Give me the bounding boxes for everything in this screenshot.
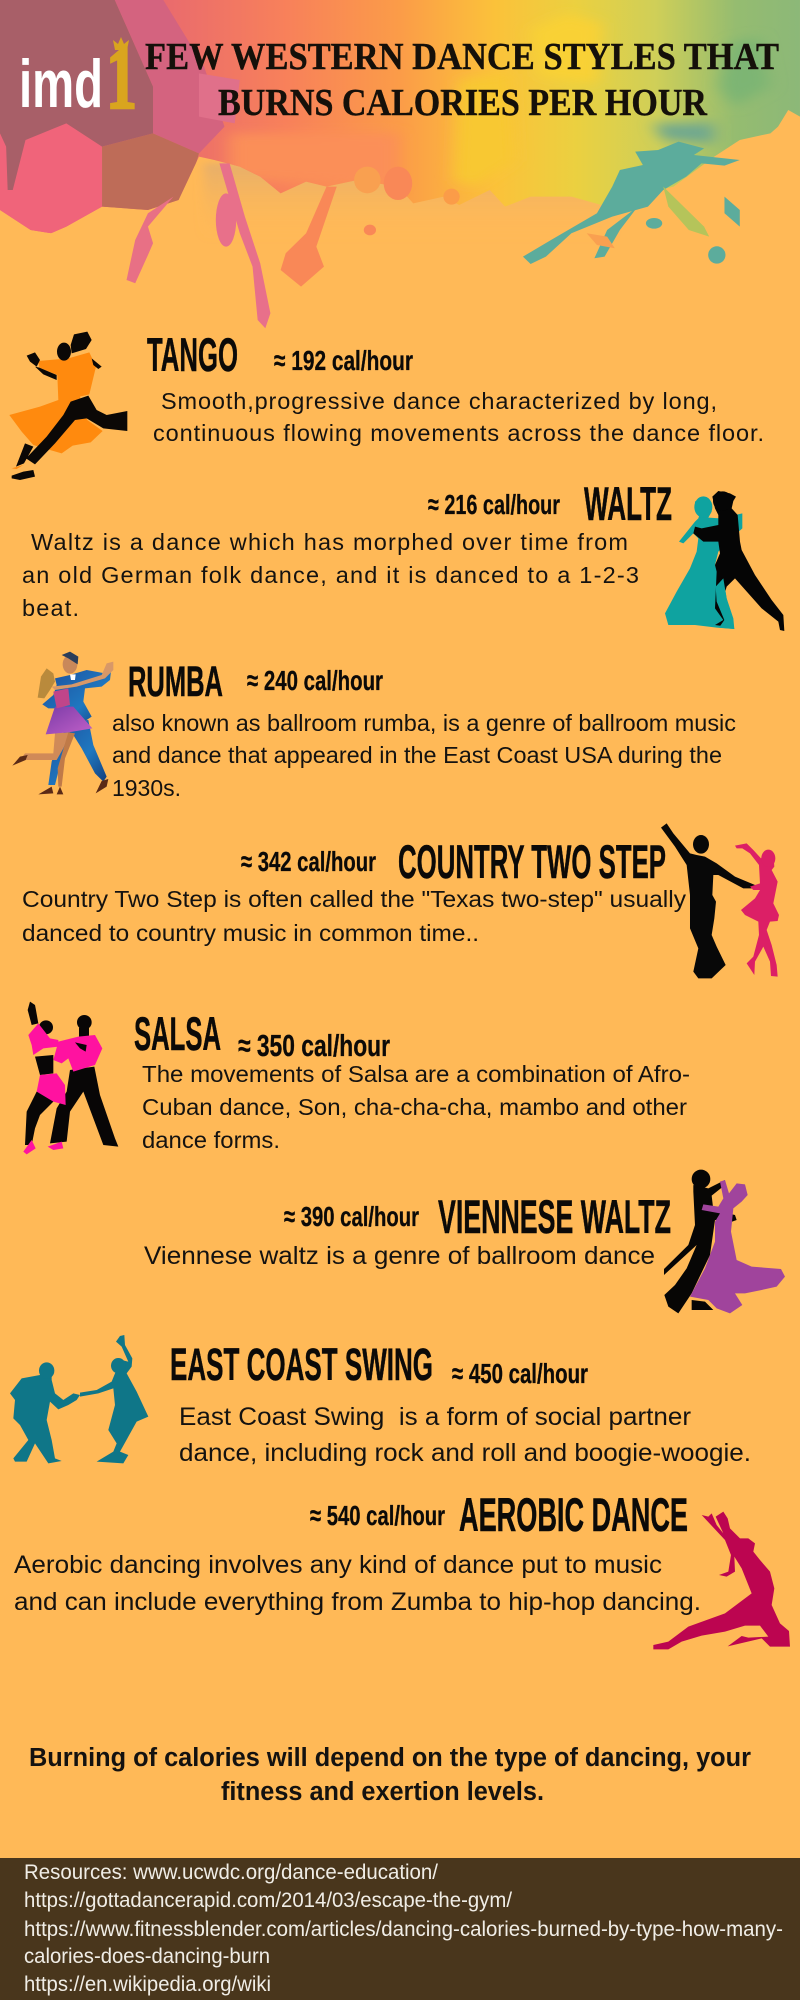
calories: waltz: ≈ 216 cal/hour	[428, 489, 560, 520]
heading: rumba: RUMBA	[128, 658, 223, 706]
title: BURNS CALORIES PER HOUR	[218, 82, 707, 124]
heading: east coast swing: EAST COAST SWING	[170, 1339, 433, 1390]
panel: rumba	[12, 652, 736, 801]
description: waltz	[22, 529, 639, 621]
calories: viennese waltz: ≈ 390 cal/hour	[284, 1201, 419, 1232]
heading: waltz: WALTZ	[584, 477, 672, 530]
calories: tango: ≈ 192 cal/hour	[274, 345, 413, 376]
closing note	[29, 1744, 751, 1806]
description: east coast swing: East Coast Swing is a form of social partner	[179, 1403, 691, 1431]
description: aerobic dance	[14, 1551, 701, 1616]
description: rumba: and dance that appeared in the East Coast USA during the	[112, 742, 722, 768]
icon: aerobic dancer	[653, 1512, 790, 1649]
panel: country two step	[22, 823, 779, 978]
description: salsa: dance forms.	[142, 1127, 280, 1153]
panel: aerobic dance	[14, 1488, 790, 1649]
calories: rumba: ≈ 240 cal/hour	[247, 665, 383, 696]
footer: resources: https://en.wikipedia.org/wiki	[24, 1972, 271, 1996]
description: salsa: Cuban dance, Son, cha-cha-cha, mambo and other	[142, 1094, 687, 1120]
panel: tango	[9, 328, 764, 480]
description: tango	[153, 388, 764, 446]
logo: imd1: 1	[106, 29, 137, 128]
panel: salsa	[23, 1002, 690, 1154]
description: waltz: Waltz is a dance which has morphed over time from	[31, 529, 628, 555]
calories: salsa: ≈ 350 cal/hour	[238, 1028, 390, 1063]
description: east coast swing	[179, 1403, 751, 1467]
footer: resources: Resources: www.ucwdc.org/dance-education/	[24, 1860, 438, 1884]
icon: viennese waltz dancers	[664, 1170, 785, 1313]
calories: east coast swing: ≈ 450 cal/hour	[452, 1358, 588, 1389]
description: rumba: 1930s.	[112, 775, 181, 801]
icon: tango dancers	[9, 332, 127, 480]
footer shadow	[140, 1828, 720, 1888]
description: rumba	[112, 710, 736, 801]
description: viennese waltz: Viennese waltz is a genre of ballroom dance	[144, 1242, 655, 1270]
paint splash header	[0, 0, 800, 328]
closing note: Burning of calories will depend on the type of dancing, your	[29, 1744, 751, 1772]
footer: resources: https://www.fitnessblender.com/articles/dancing-calories-burned-by-type-how-many-	[24, 1917, 783, 1941]
description: waltz: an old German folk dance, and it is danced to a 1-2-3	[22, 562, 639, 588]
description: aerobic dance: Aerobic dancing involves any kind of dance put to music	[14, 1551, 662, 1579]
footer: resources	[0, 1858, 800, 2000]
description: country two step: Country Two Step is often called the "Texas two-step" usually	[22, 886, 686, 912]
description: aerobic dance: and can include everything from Zumba to hip-hop dancing.	[14, 1588, 701, 1616]
description: salsa	[142, 1061, 690, 1153]
panel: viennese waltz	[144, 1170, 785, 1313]
icon: swing dancers	[10, 1335, 148, 1463]
heading: salsa: SALSA	[134, 1007, 221, 1060]
description: waltz: beat.	[22, 595, 79, 621]
description: tango: continuous flowing movements across the dance floor.	[153, 420, 764, 446]
footer: resources: https://gottadancerapid.com/2014/03/escape-the-gym/	[24, 1888, 512, 1912]
footer: resources: calories-does-dancing-burn	[24, 1944, 270, 1968]
title	[145, 36, 779, 124]
description: country two step: danced to country music in common time..	[22, 920, 479, 946]
heading: tango: TANGO	[147, 328, 238, 381]
description: salsa: The movements of Salsa are a combination of Afro-	[142, 1061, 690, 1087]
description: tango: Smooth,progressive dance characterized by long,	[161, 388, 717, 414]
description: country two step	[22, 886, 686, 946]
icon: country two step dancers	[661, 823, 779, 978]
icon: waltz dancers	[665, 491, 784, 631]
calories: country two step: ≈ 342 cal/hour	[241, 846, 376, 877]
closing note: fitness and exertion levels.	[221, 1778, 544, 1806]
panel: east coast swing	[10, 1335, 751, 1467]
panel: waltz	[22, 477, 784, 631]
description: east coast swing: dance, including rock and roll and boogie-woogie.	[179, 1439, 751, 1467]
icon: rumba dancers	[12, 652, 113, 794]
logo: imd1: imd	[19, 46, 103, 122]
icon: salsa dancers	[23, 1002, 118, 1154]
calories: aerobic dance: ≈ 540 cal/hour	[310, 1500, 445, 1531]
description: rumba: also known as ballroom rumba, is a genre of ballroom music	[112, 710, 736, 736]
